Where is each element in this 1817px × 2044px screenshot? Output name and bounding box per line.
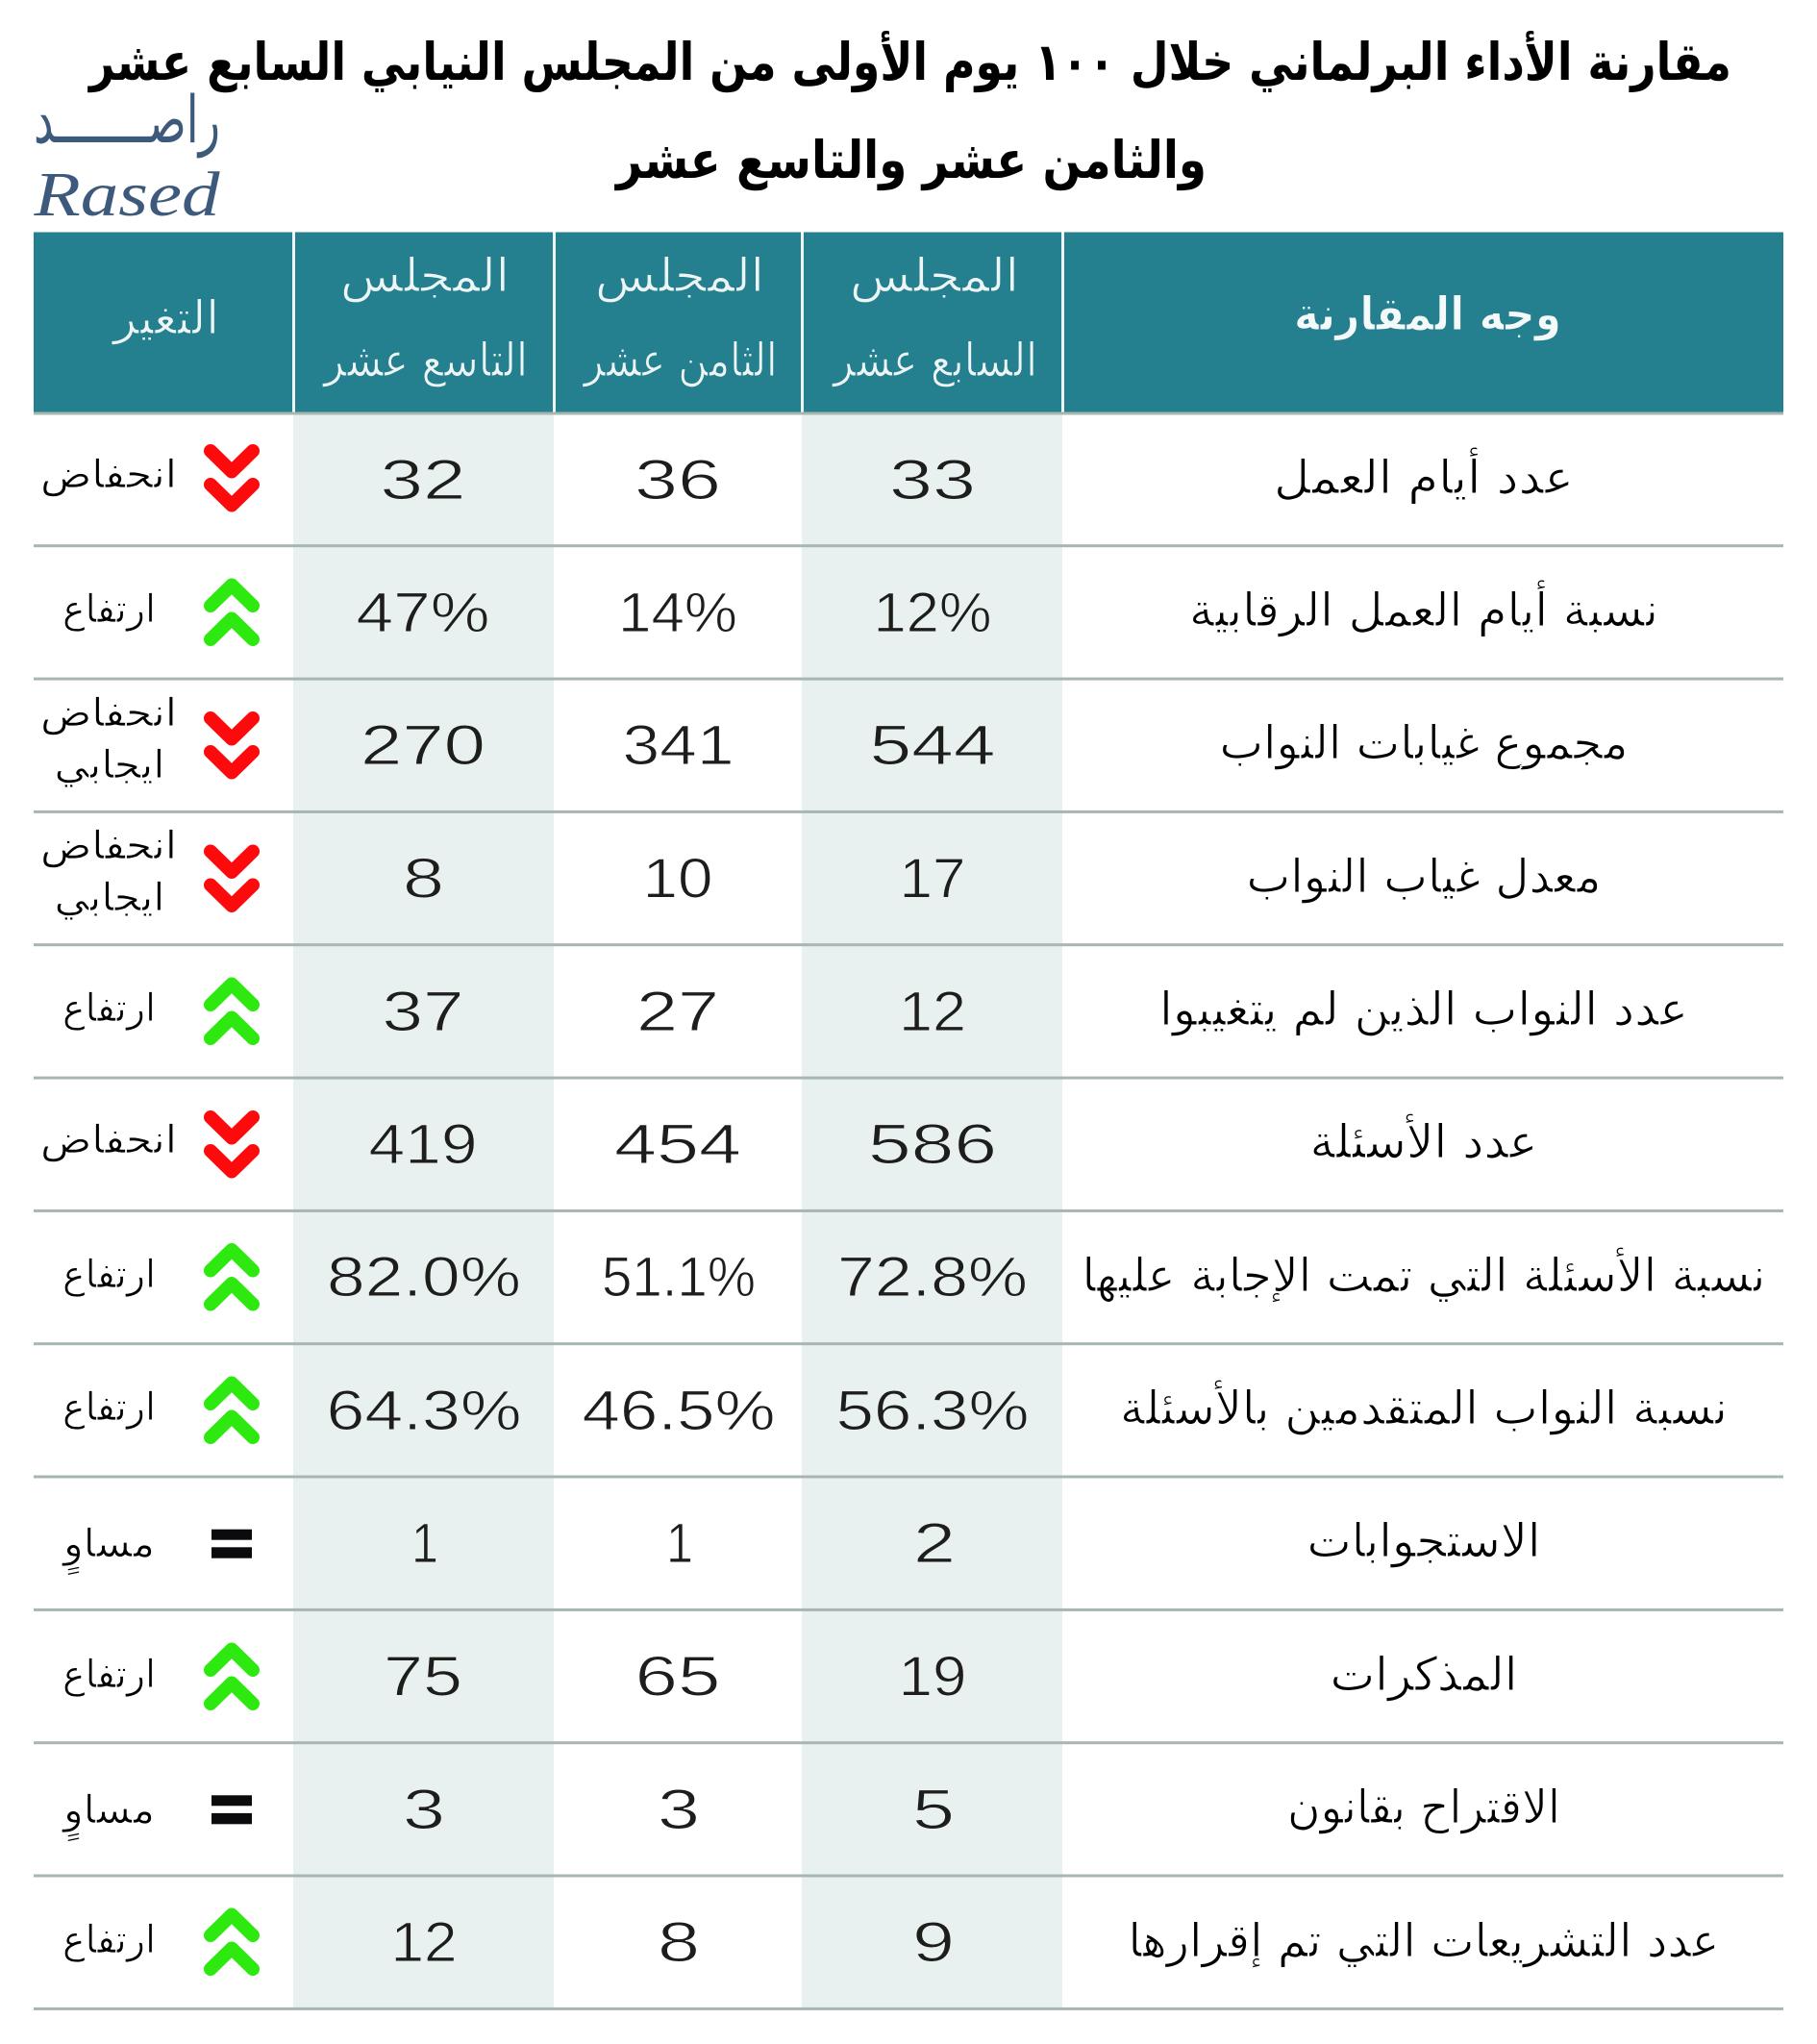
- row 8: نسبة النواب المتقدمين بالأسئلة: [1120, 1379, 1728, 1435]
- header: 19th council: التاسع عشر: [322, 334, 528, 387]
- logo: Rased: Rased: [33, 160, 221, 230]
- logo: Rased: راصـــــــد: [34, 83, 220, 159]
- row 4: 10: [642, 848, 713, 910]
- row 12: 8: [658, 1911, 700, 1974]
- title: والثامن عشر والتاسع عشر: [613, 130, 1207, 190]
- row 4: معدل غياب النواب: [1246, 850, 1602, 904]
- icon: up chevrons: [211, 1383, 253, 1437]
- row 6: عدد الأسئلة: [1309, 1112, 1538, 1169]
- label: positive decrease: [40, 824, 177, 920]
- row 5: عدد النواب الذين لم يتغيبوا: [1159, 983, 1688, 1036]
- row 10: 19: [898, 1646, 967, 1707]
- row 8: [62, 1379, 1728, 1442]
- row 3: [40, 691, 1629, 787]
- icon: up chevrons: [211, 1915, 253, 1969]
- row 5: 12: [899, 981, 966, 1043]
- row 8: 56.3%: [836, 1380, 1029, 1442]
- row 9: [62, 1512, 1541, 1576]
- row 9: 1: [411, 1512, 438, 1575]
- row 3: 544: [869, 714, 996, 777]
- row 1: 33: [889, 449, 976, 511]
- row 2: [62, 580, 1658, 644]
- row 12: 12: [390, 1911, 458, 1974]
- row 7: 51.1%: [602, 1246, 756, 1309]
- row 2: نسبة أيام العمل الرقابية: [1189, 580, 1658, 637]
- header: 18th council: الثامن عشر: [583, 334, 777, 387]
- header: 18th council: [583, 249, 777, 387]
- row 4: 17: [900, 848, 965, 910]
- row 8: 64.3%: [327, 1380, 521, 1442]
- row 1: 36: [635, 449, 721, 511]
- row 3: 341: [623, 714, 734, 777]
- icon: down chevrons: [211, 1117, 253, 1171]
- row 10: ارتفاع: [62, 1653, 156, 1697]
- header: comparison aspect: وجه المقارنة: [1294, 287, 1561, 341]
- icon: up chevrons: [211, 1650, 253, 1704]
- row 5: 27: [636, 981, 719, 1043]
- icon: up chevrons: [211, 985, 253, 1038]
- row 7: [62, 1246, 1765, 1309]
- row 10: المذكرات: [1331, 1648, 1517, 1702]
- row 3: 270: [361, 714, 485, 777]
- icon: up chevrons: [211, 1250, 253, 1304]
- table header: [34, 233, 1783, 412]
- label: positive decrease: [40, 691, 177, 787]
- row 7: ارتفاع: [62, 1253, 156, 1297]
- title: مقارنة الأداء البرلماني خلال ١٠٠ يوم الأولى من المجلس النيابي السابع عشر: [87, 31, 1731, 92]
- row 10: 75: [384, 1646, 462, 1707]
- row 11: 3: [658, 1779, 700, 1841]
- row 11: مساوٍ: [62, 1788, 155, 1842]
- row 10: 65: [635, 1646, 721, 1707]
- icon: down chevrons: [211, 718, 253, 773]
- header: 17th council: المجلس: [850, 249, 1019, 303]
- row 6: 454: [614, 1113, 741, 1176]
- row 12: ارتفاع: [62, 1918, 156, 1962]
- row 2: 47%: [356, 582, 490, 644]
- row 8: 46.5%: [583, 1380, 775, 1442]
- row 6: انحفاض: [40, 1118, 177, 1162]
- row 6: [40, 1112, 1538, 1176]
- row 9: الاستجوابات: [1307, 1514, 1540, 1568]
- icon: up chevrons: [211, 585, 253, 639]
- row 9: 1: [666, 1512, 693, 1575]
- shaded columns: [293, 414, 1062, 2007]
- row 4: [40, 824, 1602, 920]
- title: [87, 31, 1731, 190]
- icon: equal: [212, 1530, 252, 1558]
- row 5: ارتفاع: [62, 986, 156, 1031]
- row 7: 82.0%: [327, 1246, 521, 1309]
- label: positive decrease: انحفاض: [40, 691, 177, 735]
- header: 17th council: السابع عشر: [832, 334, 1037, 387]
- header: 19th council: [322, 249, 528, 387]
- row 12: [62, 1911, 1719, 1974]
- row 7: 72.8%: [837, 1246, 1028, 1309]
- row 6: 586: [868, 1113, 997, 1176]
- row 1: انحفاض: [40, 453, 177, 497]
- row 2: ارتفاع: [62, 587, 156, 632]
- header: 17th council: [832, 249, 1037, 387]
- label: positive decrease: ايجابي: [54, 876, 165, 920]
- icon: equal: [212, 1795, 252, 1824]
- icon: down chevrons: [211, 852, 253, 906]
- header: 18th council: المجلس: [595, 249, 764, 303]
- row 2: 12%: [873, 582, 992, 644]
- logo: Rased: [33, 83, 221, 230]
- label: positive decrease: ايجابي: [54, 743, 165, 787]
- row 11: 5: [912, 1779, 955, 1841]
- row divider lines: [34, 411, 1783, 2010]
- row 12: عدد التشريعات التي تم إقرارها: [1129, 1914, 1719, 1968]
- row 10: [62, 1646, 1517, 1707]
- row 9: 2: [913, 1512, 956, 1575]
- row 1: [40, 447, 1574, 511]
- row 12: 9: [912, 1911, 955, 1974]
- row 9: مساوٍ: [62, 1522, 155, 1576]
- row 11: الاقتراح بقانون: [1287, 1781, 1560, 1834]
- icon: down chevrons: [211, 451, 253, 506]
- row 6: 419: [369, 1113, 477, 1176]
- header: change: التغير: [112, 291, 219, 345]
- header: 19th council: المجلس: [340, 249, 510, 303]
- label: positive decrease: انحفاض: [40, 824, 177, 868]
- row 11: 3: [403, 1779, 445, 1841]
- row 3: مجموع غيابات النواب: [1219, 716, 1629, 770]
- row 8: ارتفاع: [62, 1385, 156, 1430]
- row 1: عدد أيام العمل: [1274, 447, 1574, 505]
- row 5: [62, 981, 1688, 1043]
- row 11: [62, 1779, 1560, 1842]
- row 7: نسبة الأسئلة التي تمت الإجابة عليها: [1083, 1246, 1765, 1303]
- row 5: 37: [383, 981, 463, 1043]
- row 4: 8: [403, 848, 444, 910]
- row 1: 32: [381, 449, 465, 511]
- row 2: 14%: [618, 582, 737, 644]
